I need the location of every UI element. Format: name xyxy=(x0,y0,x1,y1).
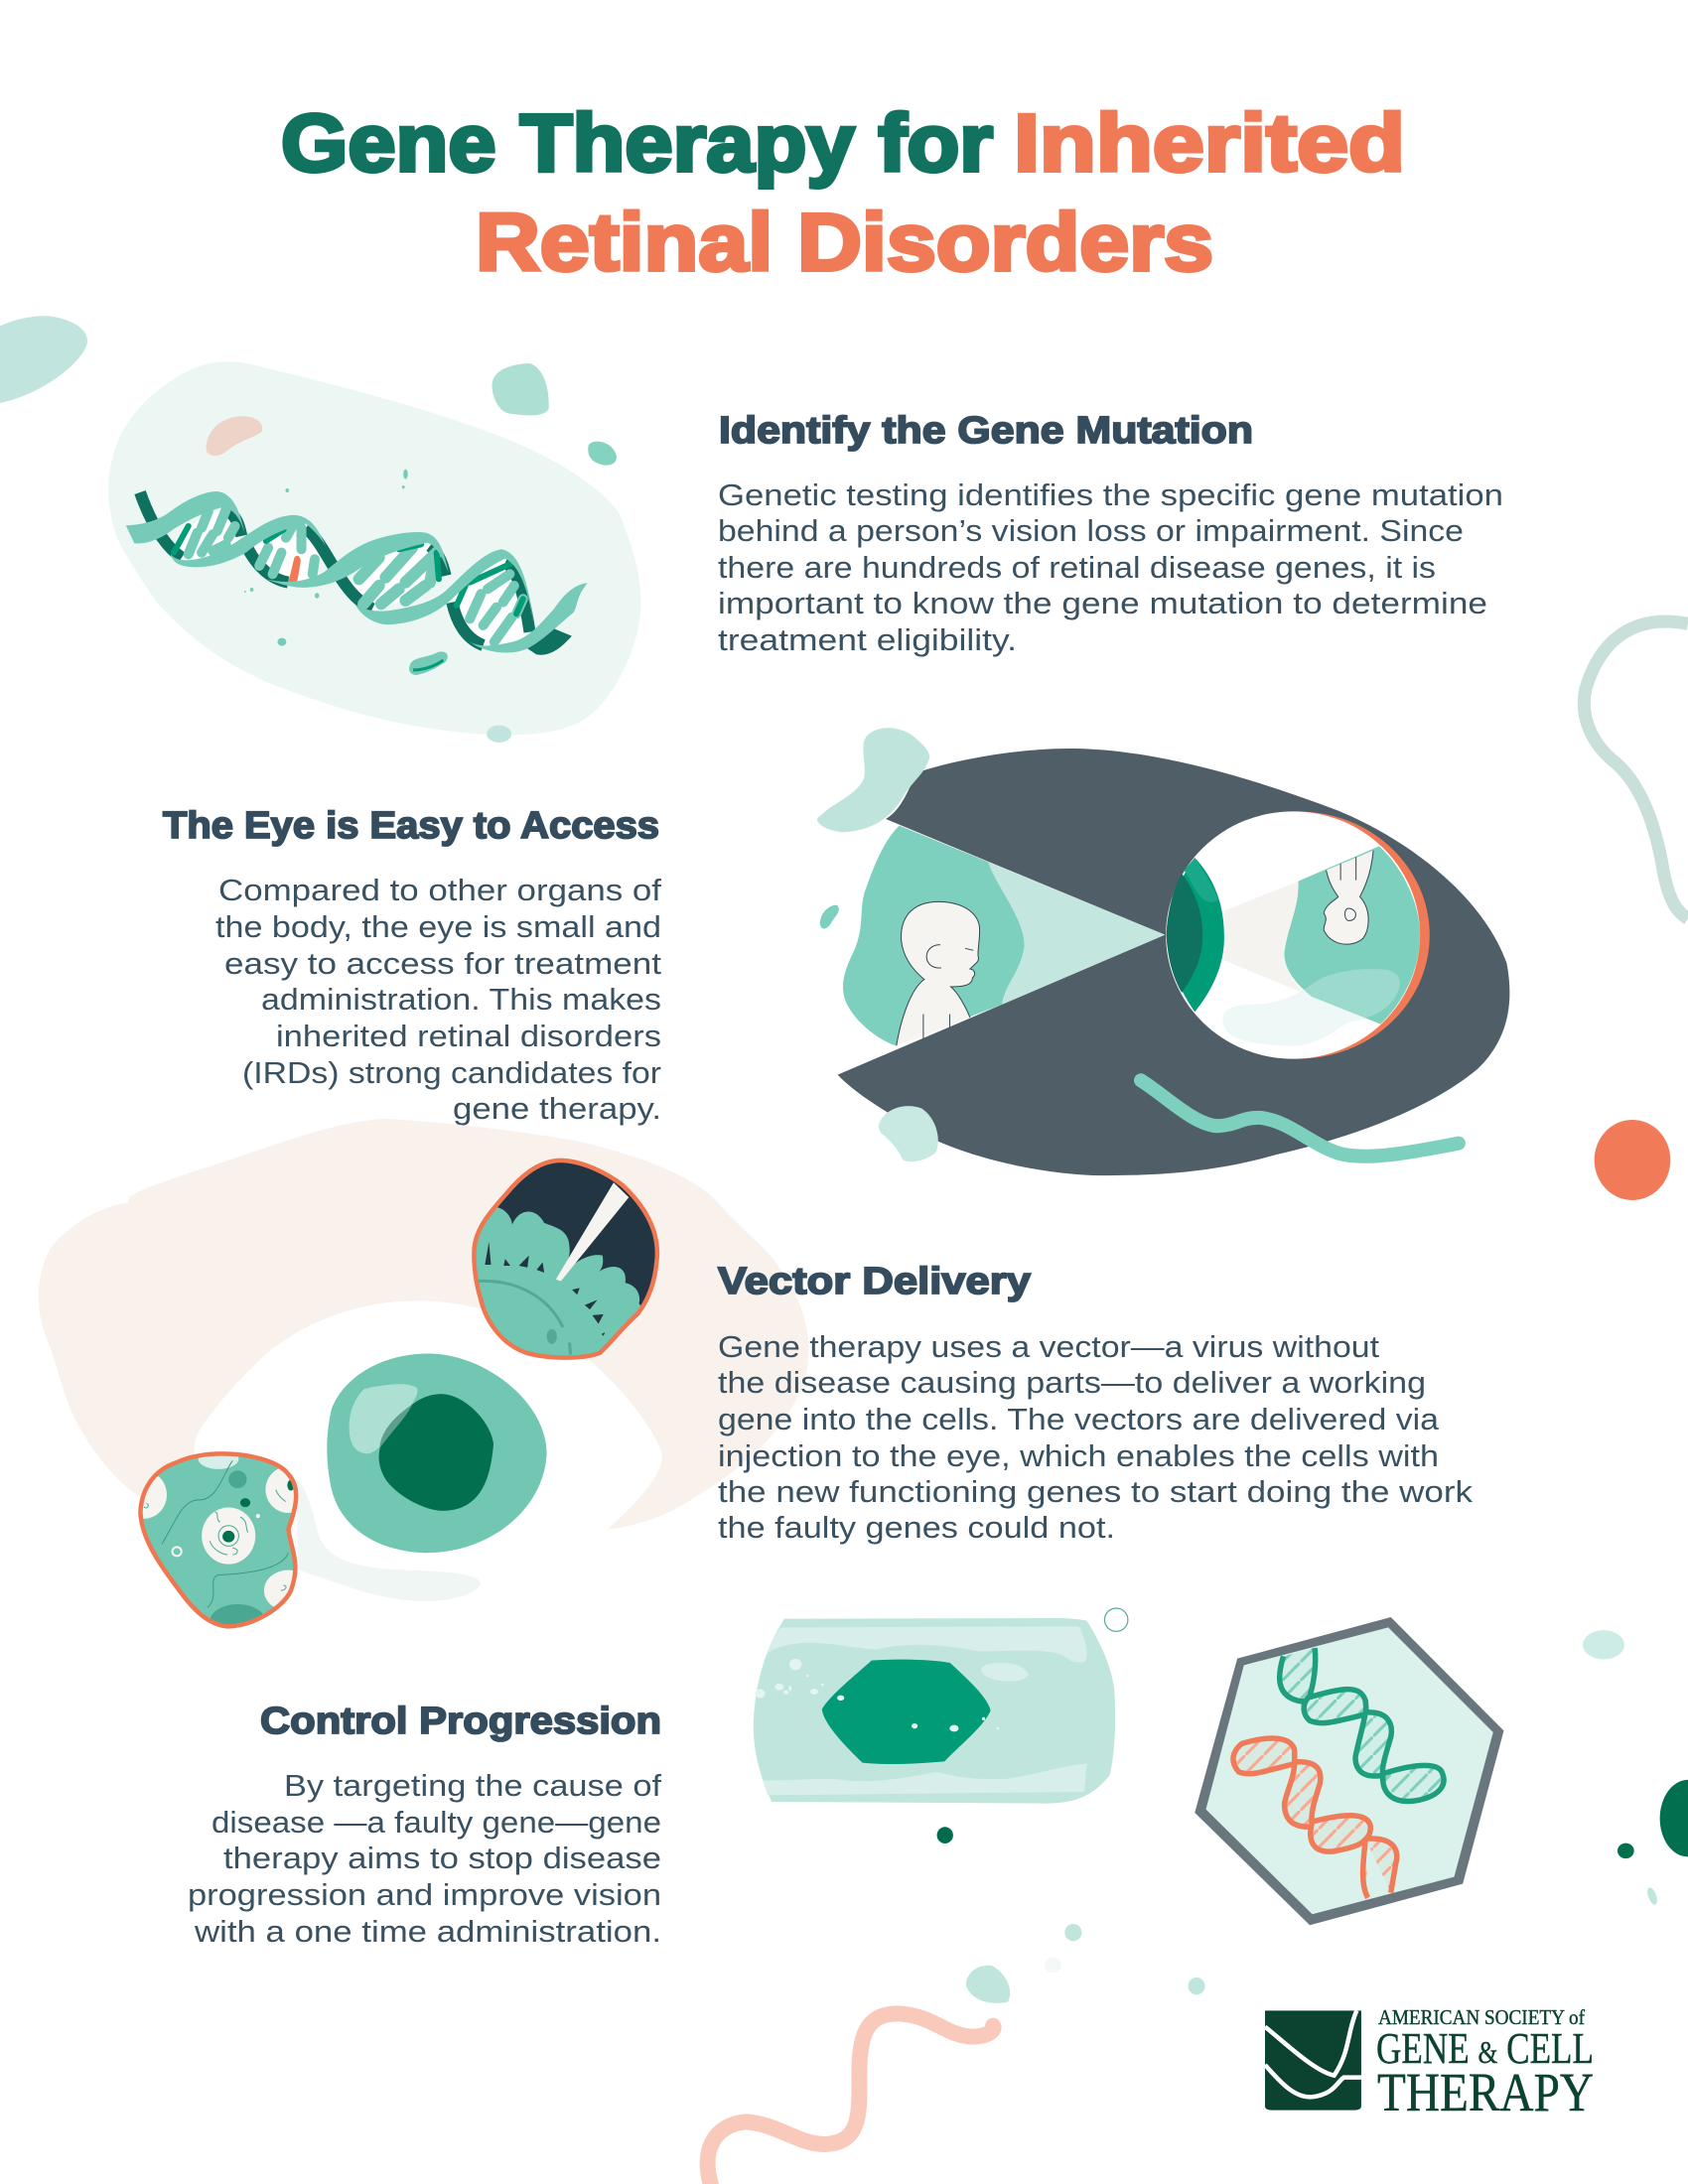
text block: vector delivery: injection to the eye, which enables the cells with xyxy=(718,1438,1439,1473)
text block: vector delivery: the faulty genes could not. xyxy=(718,1510,1115,1545)
decorative shapes: right side xyxy=(1583,621,1688,1906)
text block: control progression: therapy aims to stop disease xyxy=(223,1841,661,1875)
iris and pupil xyxy=(327,1353,547,1553)
title xyxy=(281,98,1405,288)
text block: control progression: progression and improve vision xyxy=(188,1877,661,1912)
text block: the eye is easy to access: administration. This makes xyxy=(261,982,661,1017)
illustration: eye with injection and retinal cells xyxy=(39,1119,808,1638)
text block: control progression: disease —a faulty gene—gene xyxy=(211,1805,661,1840)
illustration: DNA helix with mutation xyxy=(0,316,640,743)
text block: control progression: with a one time administration. xyxy=(194,1914,661,1949)
title: Inherited xyxy=(1014,98,1405,189)
logo: American Society of Gene & Cell Therapy xyxy=(1265,2005,1594,2122)
text block: vector delivery: Gene therapy uses a vector—a virus without xyxy=(718,1329,1379,1364)
text block: control progression: By targeting the cause of xyxy=(284,1768,661,1803)
text block: identify the gene mutation: behind a person’s vision loss or impairment. Since xyxy=(718,513,1464,548)
text block: vector delivery: the new functioning genes to start doing the work xyxy=(718,1474,1474,1509)
text block: vector delivery: gene into the cells. The vectors are delivered via xyxy=(718,1402,1440,1436)
text block: identify the gene mutation: treatment eligibility. xyxy=(718,622,1017,657)
logo: American Society of Gene & Cell Therapy: THERAPY xyxy=(1377,2062,1594,2122)
text block: identify the gene mutation: important to know the gene mutation to determine xyxy=(718,586,1487,620)
inverted baby xyxy=(1324,851,1373,944)
text block: identify the gene mutation: there are hundreds of retinal disease genes, it is xyxy=(718,550,1436,585)
callout: retinal cells xyxy=(138,1451,298,1629)
heading: vector delivery: Vector Delivery xyxy=(718,1261,1031,1302)
text block: identify the gene mutation xyxy=(718,478,1503,657)
text block: the eye is easy to access: gene therapy. xyxy=(453,1091,661,1126)
text block: the eye is easy to access: (IRDs) strong candidates for xyxy=(242,1055,661,1090)
logo mark xyxy=(1265,2010,1361,2111)
text block: vector delivery: the disease causing parts—to deliver a working xyxy=(718,1365,1426,1400)
text block: the eye is easy to access: the body, the eye is small and xyxy=(215,909,661,944)
vector capsid in cell xyxy=(754,1618,1115,1804)
hexagon with healthy and faulty genes xyxy=(1195,1617,1503,1925)
text block: the eye is easy to access: easy to access for treatment xyxy=(224,946,661,981)
logo: American Society of Gene & Cell Therapy: GENE & CELL xyxy=(1376,2024,1594,2073)
heading: control progression: Control Progression xyxy=(260,1701,661,1742)
text block: identify the gene mutation: Genetic testing identifies the specific gene mutation xyxy=(718,478,1503,512)
illustration: eye projecting inverted image xyxy=(817,728,1509,1175)
heading: the eye is easy to access: The Eye is Easy to Access xyxy=(163,805,659,847)
heading: identify the gene mutation: Identify the Gene Mutation xyxy=(719,410,1253,452)
baby xyxy=(897,901,980,1045)
text block: the eye is easy to access: Compared to other organs of xyxy=(218,873,661,907)
illustration: vector and gene hexagon xyxy=(754,1608,1503,1941)
decorative shapes: bottom squiggle and dots xyxy=(708,1924,1204,2184)
text block: control progression xyxy=(188,1768,661,1949)
text block: the eye is easy to access xyxy=(215,873,661,1126)
lens xyxy=(1167,858,1224,1012)
logo: American Society of Gene & Cell Therapy: AMERICAN SOCIETY of xyxy=(1378,2005,1585,2029)
text block: the eye is easy to access: inherited retinal disorders xyxy=(276,1019,661,1053)
title: Retinal Disorders xyxy=(476,198,1213,288)
text block: vector delivery xyxy=(718,1329,1474,1545)
mutation highlight xyxy=(288,556,301,583)
callout: injection into retina xyxy=(466,1157,668,1361)
title: Gene Therapy for xyxy=(281,98,993,189)
